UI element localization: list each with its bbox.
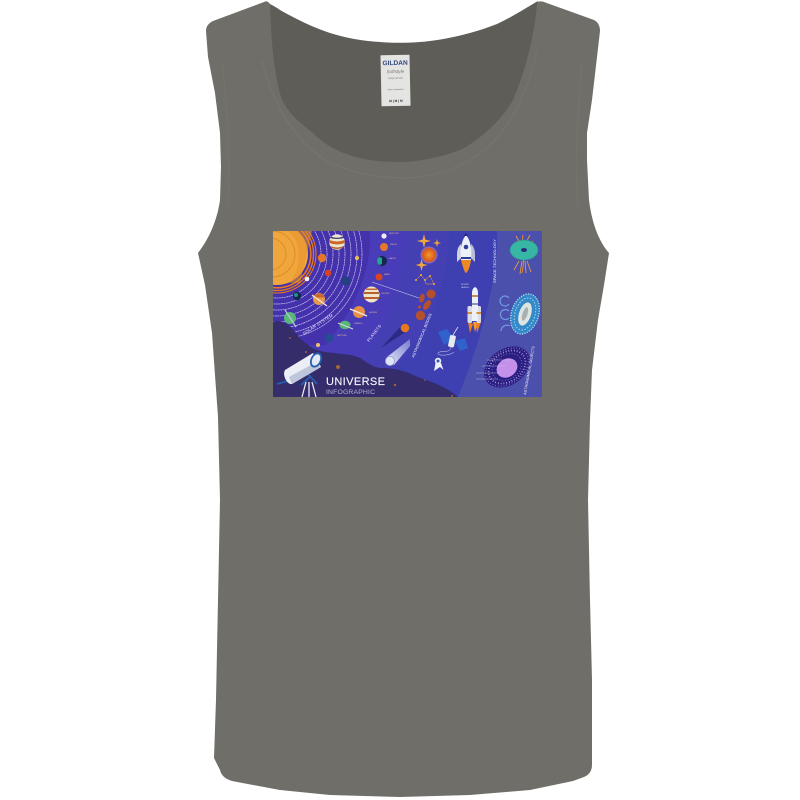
planet captions: MARS [384,273,390,276]
torus galaxy [510,235,538,274]
planet: ringed orange [312,293,327,306]
planet: earth dark [293,292,301,300]
telescope [277,350,324,397]
planet captions: NEPTUNE [337,335,347,337]
band: solar system [273,231,370,345]
heading: planets: PLANETS [366,323,382,343]
star: lower [416,259,428,271]
planets column: saturn [350,306,367,318]
planets column: mars [376,274,382,280]
meteor [381,324,409,348]
dark hill [273,321,458,397]
planet captions [337,233,400,337]
sun [273,231,317,294]
planet: orange [318,254,326,262]
rocket caption: LAUNCH [461,286,469,289]
planet captions: JUPITER [381,293,390,295]
planets column: jupiter [364,286,380,302]
asteroids [416,290,436,320]
astronaut with tether [434,346,454,371]
hem shading [219,760,592,779]
shuttle rocket [457,233,475,273]
style name: Softstyle [386,69,405,74]
planet: striped giant, solar orbit [329,234,345,250]
neck label tag [380,55,411,106]
orbits [273,231,362,336]
armhole seams [222,60,582,210]
planet captions: VENUS [390,244,398,246]
planet: red [325,270,331,276]
planet: yellow small [355,256,359,260]
planets column: uranus [338,321,353,329]
launch rocket [468,287,481,333]
collar seam [262,50,537,178]
spiral galaxy [505,290,545,338]
constellation [415,274,435,285]
planet captions: MERCURY [389,233,400,235]
rocket caption: ROCKET [461,284,470,286]
band: astronomical objects [458,231,542,397]
planets column: venus [380,243,388,251]
tank top garment [198,1,609,797]
heading: solar system: SOLAR SYSTEM [302,312,334,336]
subtitle: infographic: INFOGRAPHIC [326,389,375,396]
fabric line: RING SPUN [388,76,403,80]
care text: Made in Bangladesh [387,89,404,91]
band: astronomical bodies [273,231,449,397]
rocket caption [461,284,470,289]
planet: ringed green [284,310,296,327]
planet captions: EARTH [389,257,396,260]
satellite [438,327,468,351]
size text: M | M | M [389,99,403,103]
planet: white small [305,277,309,281]
star sun [420,246,438,264]
comet [385,339,410,366]
decorative hill stars [289,337,453,397]
planets column: pluto [316,343,320,347]
star: large top [417,234,431,248]
planets column: mercury [381,233,387,239]
planet captions: SATURN [369,311,378,314]
title: universe: UNIVERSE [326,376,385,388]
heading: astronomical bodies: ASTRONOMICAL BODIES [411,312,433,358]
infographic print [273,231,542,397]
planet captions: URANUS [354,322,363,325]
brand name: GILDAN [382,60,408,67]
band: planets [273,231,405,397]
pointer line [372,282,419,298]
planets column: earth [377,256,387,266]
heading: space technology: SPACE TECHNOLOGY [492,239,497,283]
band: space technology [396,231,497,397]
purple galaxy [476,338,538,396]
planets column: neptune [324,334,334,342]
tank top back panel [266,1,538,175]
blue arc gauges [500,296,510,331]
galaxy pointer lines [476,360,510,379]
star: small top [433,239,441,247]
heading: astronomical objects: ASTRONOMICAL OBJECTS [523,345,536,395]
planet: blue [341,276,351,286]
